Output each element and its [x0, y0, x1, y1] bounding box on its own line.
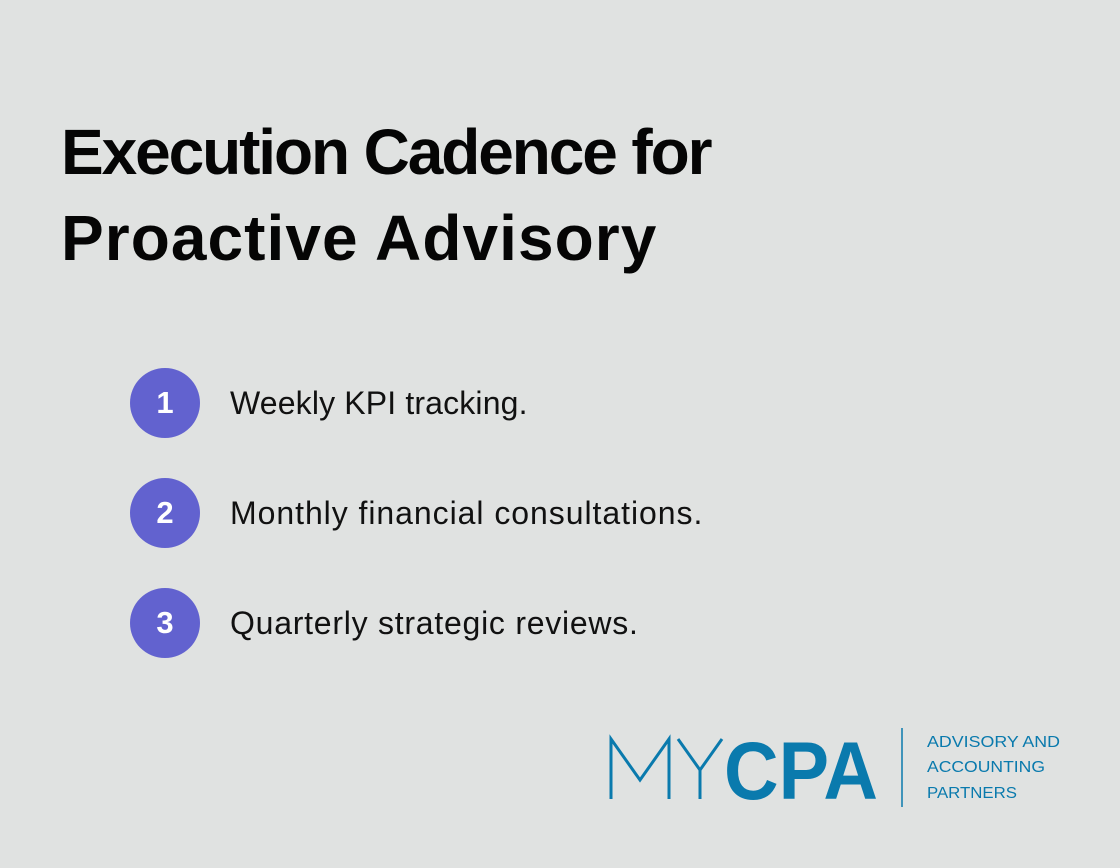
item 3: [130, 588, 639, 658]
logo tagline: ACCOUNTING: [927, 759, 1045, 776]
logo tagline: ADVISORY AND: [927, 734, 1060, 751]
title: Execution Cadence for: [61, 116, 710, 188]
item 1: [130, 368, 528, 438]
number badge 1: [130, 368, 200, 438]
divider: [901, 728, 903, 807]
item 2: [130, 478, 703, 548]
logo wordmark CPA: CPA: [724, 726, 878, 817]
title: [61, 116, 712, 274]
logo tagline: [927, 734, 1060, 802]
number badge 2: 2: [156, 495, 174, 530]
logo tagline: PARTNERS: [927, 785, 1017, 802]
label 3: Quarterly strategic reviews.: [230, 605, 639, 641]
number badge 3: 3: [156, 605, 174, 640]
title: Proactive Advisory: [61, 202, 657, 274]
number badge 1: 1: [156, 385, 174, 420]
label 1: Weekly KPI tracking.: [230, 385, 528, 421]
logo wordmark MY: [611, 739, 722, 799]
label 2: Monthly financial consultations.: [230, 495, 703, 531]
logo: [610, 726, 1060, 817]
number badge 3: [130, 588, 200, 658]
number badge 2: [130, 478, 200, 548]
